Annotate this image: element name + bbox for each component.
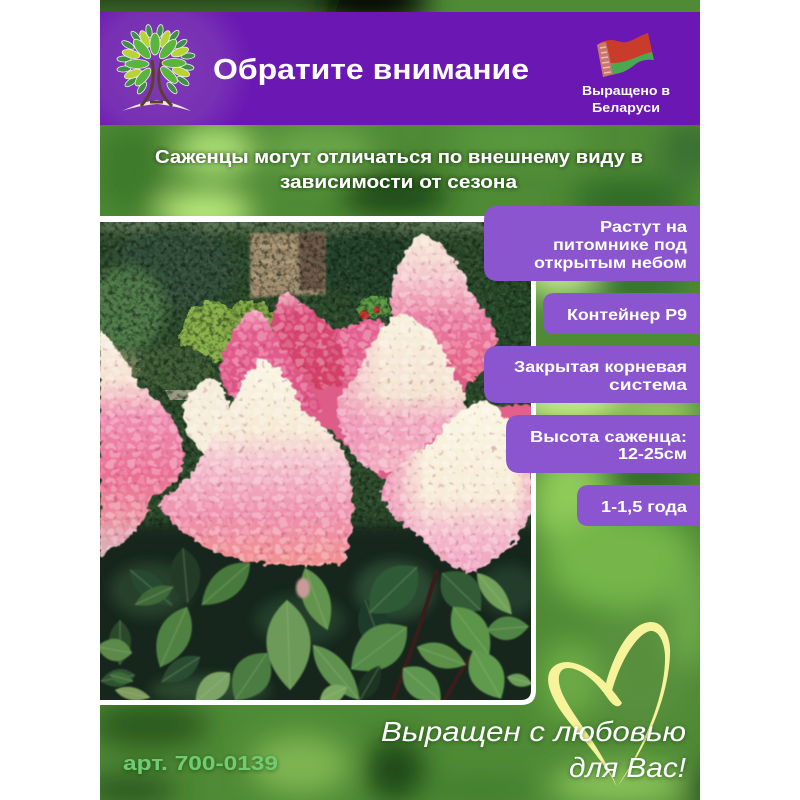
slogan: для Вас!	[569, 752, 686, 783]
garden background	[85, 218, 545, 542]
flower: back left	[220, 309, 322, 412]
pill: open air: питомнике под	[553, 237, 687, 254]
icon: yellow heart	[548, 622, 670, 787]
pill: height: 12-25см	[618, 446, 687, 463]
subtitle: зависимости от сезона	[280, 172, 518, 192]
subtitle: Саженцы могут отличаться по внешнему виду в	[155, 147, 643, 167]
flower: left edge	[100, 332, 184, 555]
pill: open air	[484, 206, 700, 281]
pill: height	[506, 415, 700, 473]
flower mass underlay	[274, 328, 468, 480]
icon: Belarus flag	[597, 33, 654, 77]
pill: age: 1-1,5 года	[601, 499, 687, 516]
background: blurred green bokeh	[100, 0, 700, 800]
flowers	[100, 233, 535, 573]
pill: age	[577, 485, 700, 526]
pill: container: Контейнер Р9	[567, 307, 687, 324]
flag caption: Беларуси	[592, 101, 660, 115]
pill: closed root system	[484, 346, 700, 403]
foliage base	[100, 519, 531, 700]
logo: tree	[117, 24, 195, 111]
slogan	[381, 716, 686, 783]
flower: large right	[380, 400, 531, 573]
flower: back centre	[273, 293, 385, 390]
pill: container	[543, 293, 700, 334]
pill: height: Высота саженца:	[530, 429, 687, 446]
subtitle	[155, 147, 643, 192]
flower: back right	[390, 233, 498, 382]
header band	[100, 12, 700, 125]
slogan: Выращен с любовью	[381, 716, 686, 747]
leaves	[95, 547, 534, 712]
pill: closed root system: система	[609, 377, 687, 394]
bud under flower	[296, 578, 310, 598]
flower: pink behind right pill	[498, 403, 531, 420]
pill: open air: открытым небом	[534, 255, 687, 272]
flag caption	[582, 84, 670, 115]
flower: large centre right	[337, 313, 466, 472]
pill: open air: Растут на	[600, 219, 687, 236]
photo frame	[100, 216, 536, 705]
flower: main centre	[158, 360, 353, 566]
pill: closed root system: Закрытая корневая	[514, 359, 687, 376]
photo: pink hydrangea	[100, 222, 531, 700]
info pills	[484, 206, 700, 526]
article number: арт. 700-0139	[123, 752, 278, 775]
flower: white small	[182, 378, 230, 458]
title: Обратите внимание	[213, 54, 529, 86]
flag caption: Выращено в	[582, 84, 670, 98]
